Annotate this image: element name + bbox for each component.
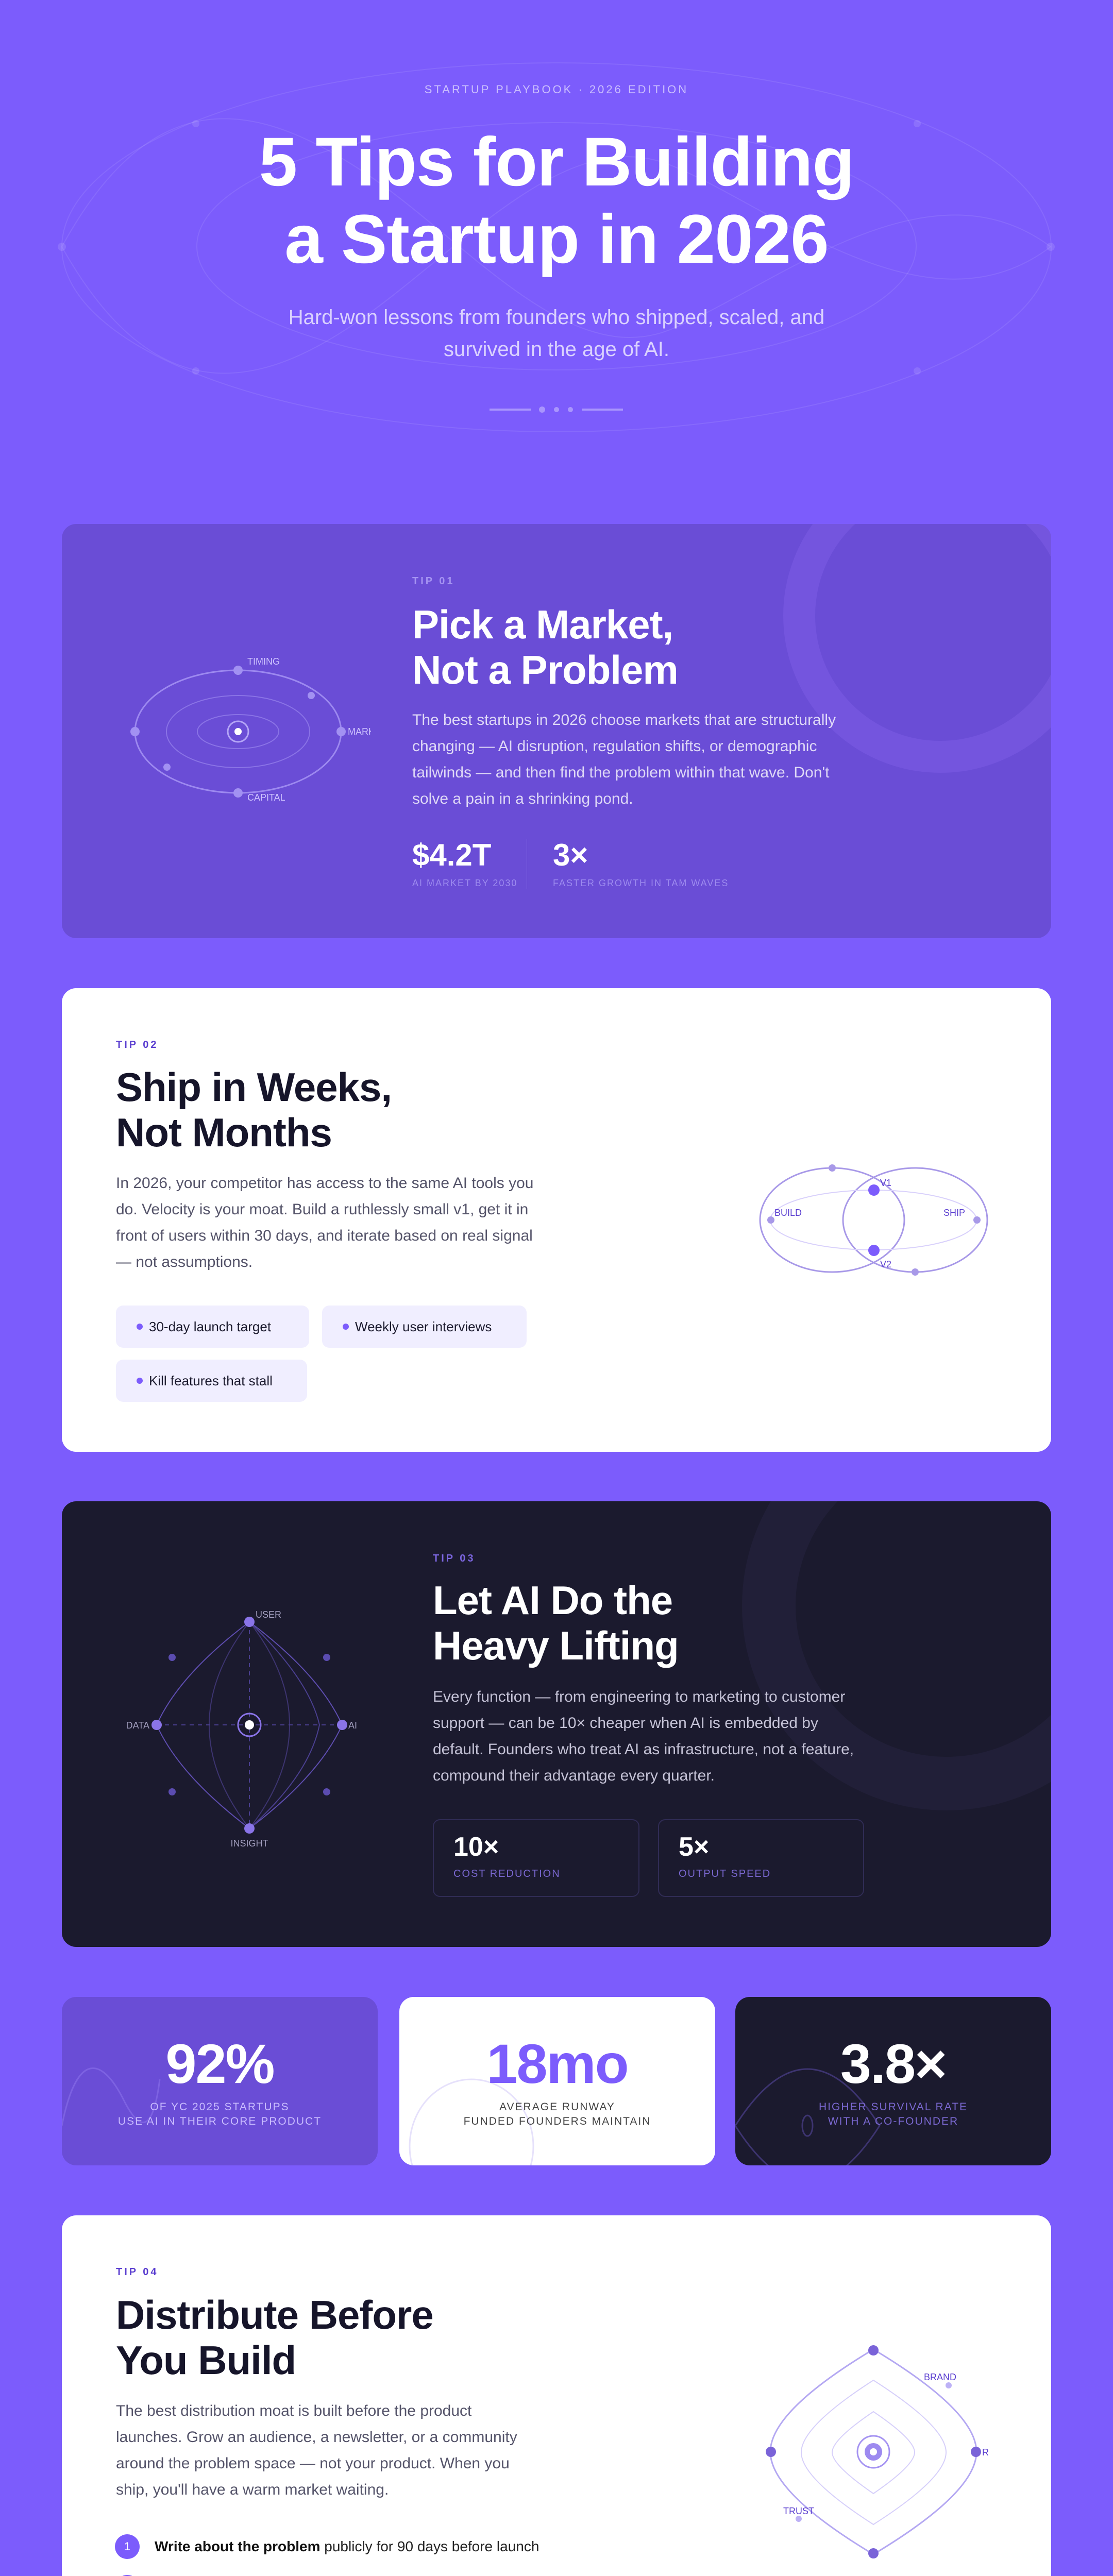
venn diagram: V2 <box>880 1259 891 1269</box>
stat: $4.2T: $4.2T <box>412 838 491 872</box>
lens diagram: AI flow: INSIGHT <box>230 1838 268 1849</box>
stat box: 10x <box>433 1819 639 1897</box>
tip 03 body: Every function — from engineering to marketing to customer <box>433 1688 845 1705</box>
orbit diagram: CAPITAL <box>247 792 285 803</box>
orbit diagram <box>130 656 371 803</box>
stat card: 3.8x: HIGHER SURVIVAL RATE <box>819 2101 968 2113</box>
tip 02 heading: Ship in Weeks, <box>116 1064 392 1110</box>
venn diagram: SHIP <box>943 1208 965 1218</box>
lens diagram: AI flow: DATA <box>126 1720 149 1731</box>
stat: 3x: FASTER GROWTH IN TAM WAVES <box>553 878 729 888</box>
title: 5 Tips for Building <box>259 124 854 200</box>
tag: 30-day <box>116 1306 309 1348</box>
stat card: 92%: OF YC 2025 STARTUPS <box>150 2101 290 2113</box>
stat box: 5x <box>658 1819 864 1897</box>
stat: $4.2T <box>412 838 517 888</box>
stat box: 10x: 10× <box>453 1832 499 1862</box>
stat: $4.2T: AI MARKET BY 2030 <box>412 878 517 888</box>
tip 04 label: TIP 04 <box>116 2266 159 2278</box>
subtitle: survived in the age of AI. <box>444 338 669 361</box>
stat: 3x: 3× <box>553 838 588 872</box>
tip 01 body: tailwinds — and then find the problem within that wave. Don't <box>412 764 830 781</box>
tip 04 heading: Distribute Before <box>116 2292 433 2337</box>
tip 04 body: around the problem space — not your product. When you <box>116 2455 510 2472</box>
decorative ring <box>742 1501 1051 1810</box>
tag: weekly interviews <box>322 1306 527 1348</box>
tip 01 body: The best startups in 2026 choose markets that are structurally <box>412 711 836 728</box>
tip 01 heading: Not a Problem <box>412 647 678 692</box>
stat card: 3.8x <box>735 1997 1051 2165</box>
venn diagram: V1 <box>880 1178 891 1188</box>
tip 02 body: front of users within 30 days, and iterate based on real signal <box>116 1227 533 1244</box>
tip 02 body <box>116 1175 533 1270</box>
tip 01 heading <box>412 602 678 692</box>
venn diagram <box>760 1164 988 1276</box>
stat card: 92%: 92% <box>165 2032 274 2095</box>
concentric lens diagram: BRAND <box>924 2372 956 2382</box>
stat card: 18mo: AVERAGE RUNWAY <box>499 2101 615 2113</box>
stat card: 3.8x: WITH A CO-FOUNDER <box>828 2115 958 2127</box>
stat box: 5x: OUTPUT SPEED <box>679 1868 771 1879</box>
tag: 30-day: 30-day launch target <box>149 1319 271 1334</box>
tip 03 body <box>433 1688 854 1784</box>
panel: tip 01 <box>62 524 1051 938</box>
tip 03 heading: Heavy Lifting <box>433 1623 679 1668</box>
tip 03 label: TIP 03 <box>433 1553 476 1564</box>
tip 01 heading: Pick a Market, <box>412 602 673 647</box>
tip 04 body: ship, you'll have a warm market waiting. <box>116 2481 389 2498</box>
tip 04 body: launches. Grow an audience, a newsletter, or a community <box>116 2429 517 2446</box>
tip 03 body: default. Founders who treat AI as infrastructure, not a feature, <box>433 1741 854 1758</box>
tip 04 body <box>116 2402 517 2498</box>
tag: kill features: Kill features that stall <box>149 1373 273 1388</box>
tip 01 body: changing — AI disruption, regulation shifts, or demographic <box>412 738 817 755</box>
stat: 3x <box>527 839 729 889</box>
step 2 <box>123 2575 132 2576</box>
tag: weekly interviews: Weekly user interviews <box>355 1319 492 1334</box>
tip 03 body: compound their advantage every quarter. <box>433 1767 715 1784</box>
tip 02 heading: Not Months <box>116 1110 332 1155</box>
step 1: Write about the problem publicly for 90 days before launch <box>155 2538 539 2554</box>
stat card: 92% <box>62 1997 378 2165</box>
concentric lens diagram <box>766 2345 989 2558</box>
stat card: 92%: USE AI IN THEIR CORE PRODUCT <box>118 2115 322 2127</box>
eyebrow: startup playbook: STARTUP PLAYBOOK · 2026 EDITION <box>425 83 688 96</box>
orbit diagram: TIMING <box>247 656 280 667</box>
stat card: 18mo: 18mo <box>486 2032 628 2095</box>
tip 02 heading <box>116 1064 392 1155</box>
lens diagram: AI flow <box>126 1609 357 1849</box>
stat card: 18mo <box>399 1997 715 2165</box>
step 1 <box>115 2534 539 2559</box>
stat box: 10x: COST REDUCTION <box>453 1868 561 1879</box>
concentric lens diagram: TRUST <box>783 2506 814 2516</box>
tip 03 heading: Let AI Do the <box>433 1578 672 1623</box>
tip 01 label: TIP 01 <box>412 575 455 587</box>
tag: kill features <box>116 1360 307 1402</box>
subtitle: Hard-won lessons from founders who shipped, scaled, and <box>289 306 824 329</box>
decorative ring <box>783 524 1051 773</box>
stat box: 5x: 5× <box>679 1832 709 1862</box>
tip 04 body: The best distribution moat is built before the product <box>116 2402 471 2419</box>
subtitle <box>289 306 824 361</box>
panel: tip 02 <box>62 988 1051 1452</box>
lens diagram: AI flow: AI <box>348 1720 357 1731</box>
lens diagram: AI flow: USER <box>256 1609 281 1620</box>
step 1: 1 <box>124 2540 130 2553</box>
numbered list <box>115 2534 539 2576</box>
panel: tip 03 <box>62 1501 1051 1947</box>
tip 04 heading: You Build <box>116 2337 296 2383</box>
tip 01 body <box>412 711 836 807</box>
title <box>259 124 854 278</box>
tip 02 body: In 2026, your competitor has access to the same AI tools you <box>116 1175 533 1192</box>
stat card: 3.8x: 3.8× <box>840 2032 946 2095</box>
hero background decoration <box>58 62 1055 432</box>
tip 03 heading <box>433 1578 679 1668</box>
hero divider <box>490 406 623 413</box>
tip 01 body: solve a pain in a shrinking pond. <box>412 790 633 807</box>
tip 04 heading <box>116 2292 433 2383</box>
title: a Startup in 2026 <box>284 201 829 278</box>
tip 02 label: TIP 02 <box>116 1039 159 1050</box>
tip 03 body: support — can be 10× cheaper when AI is embedded by <box>433 1715 818 1732</box>
venn diagram: BUILD <box>774 1208 802 1218</box>
tip 02 body: — not assumptions. <box>116 1253 252 1270</box>
panel: tip 04 <box>62 2215 1051 2576</box>
tip 02 body: do. Velocity is your moat. Build a ruthlessly small v1, get it in <box>116 1201 528 1218</box>
stat card: 18mo: FUNDED FOUNDERS MAINTAIN <box>464 2115 651 2127</box>
